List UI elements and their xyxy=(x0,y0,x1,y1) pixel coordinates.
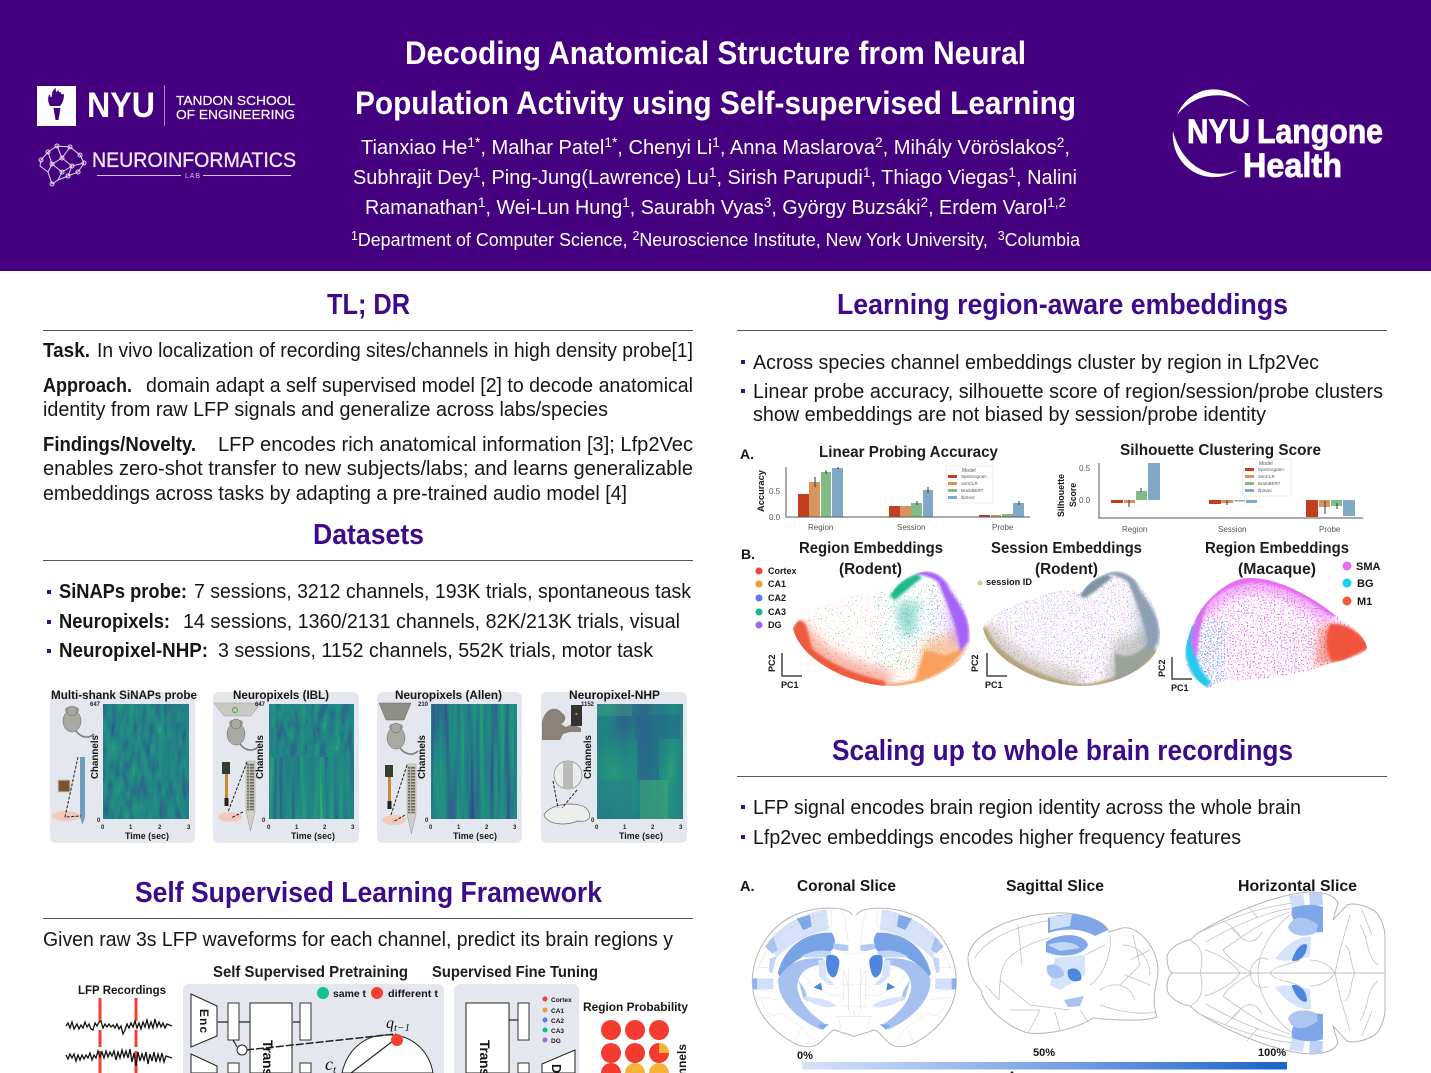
chart legend: BrainBERT xyxy=(1258,481,1281,486)
arrows xyxy=(218,1022,300,1047)
heatmap xyxy=(103,704,189,819)
legend: CA1 xyxy=(768,579,786,589)
heatmap xyxy=(597,704,683,819)
label q: t−1 xyxy=(394,1022,410,1034)
authors: , Saurabh Vyas xyxy=(630,196,764,219)
logo: NYU Tandon: NYU xyxy=(87,86,155,125)
transformer xyxy=(250,1003,292,1073)
authors: , xyxy=(1064,136,1070,159)
region probability pies: Region Probability xyxy=(583,1000,688,1014)
bar chart: silhouette clustering score: Session xyxy=(1218,525,1246,534)
title: Population Activity using Self-supervised Learning xyxy=(355,85,1076,121)
authors: Subhrajit Dey xyxy=(353,166,476,189)
title xyxy=(355,35,1076,121)
embedding bullets: show embeddings are not biased by session/probe identity xyxy=(753,403,1267,426)
logo: NYU Langone Health: Health xyxy=(1243,147,1342,185)
arrow to prediction xyxy=(351,1041,393,1073)
dataset bullets: 14 sessions, 1360/2131 channels, 82K/213K trials, visual xyxy=(183,610,680,633)
dataset card: Neuropixels IBL xyxy=(213,690,359,843)
LFP recordings xyxy=(66,983,172,1073)
icon: mouse xyxy=(387,723,418,754)
panel: self supervised learning framework xyxy=(43,877,693,1073)
point cloud xyxy=(793,571,970,688)
bar chart: silhouette clustering score: 0.0 xyxy=(1079,496,1091,505)
approach text: Approach. xyxy=(43,374,132,397)
region legend: Cortex xyxy=(551,997,572,1004)
scaling bullets: LFP signal encodes brain region identity across the whole brain xyxy=(753,796,1301,819)
authors: , Thiago Viegas xyxy=(870,166,1008,189)
dataset card: Neuropixel-NHP xyxy=(541,690,687,843)
dataset card: Neuropixel-NHP: 0 xyxy=(595,825,599,831)
pretraining diagram xyxy=(183,984,444,1073)
bar chart: silhouette clustering score xyxy=(1056,442,1363,534)
region legend: CA3 xyxy=(551,1028,564,1035)
affiliations: 1 xyxy=(351,229,358,243)
dataset card: Neuropixel-NHP: 2 xyxy=(651,825,655,831)
legend xyxy=(756,566,797,630)
logo: NYU Tandon xyxy=(37,85,295,126)
encoder second xyxy=(191,1054,217,1073)
brain: horizontal slice xyxy=(1167,892,1385,1054)
chart legend: lfp2vec xyxy=(961,495,976,500)
dataset card: Neuropixels Allen xyxy=(377,690,522,843)
heading: TL; DR: TL; DR xyxy=(327,289,410,321)
approach text: identity from raw LFP signals and generalize across labs/species xyxy=(43,398,608,421)
brain: sagittal slice xyxy=(968,913,1158,1033)
dataset card: Neuropixels IBL: Neuropixels (IBL) xyxy=(233,690,329,702)
authors: , Chenyi Li xyxy=(617,136,712,159)
dataset card: Neuropixel-NHP: 1 xyxy=(623,825,627,831)
panel: TL;DR xyxy=(43,289,693,505)
chart legend: Spectrogram xyxy=(1258,467,1284,472)
logo: Neuroinformatics Lab: NEUROINFORMATICS xyxy=(92,149,296,172)
dataset card: Neuropixels Allen: Channels xyxy=(416,735,428,779)
heatmap xyxy=(431,704,517,819)
logo: NYU Tandon: OF ENGINEERING xyxy=(176,107,295,122)
logo: NYU Langone Health: NYU xyxy=(1187,113,1250,151)
colour scale: 100% xyxy=(1258,1047,1286,1059)
panel: scaling up to whole brain recordings xyxy=(737,735,1387,1073)
dataset card: Neuropixel-NHP: 0 xyxy=(591,818,595,824)
dataset bullets xyxy=(47,580,692,662)
dataset card: Neuropixels IBL: 3 xyxy=(351,825,355,831)
affiliations: Neuroscience Institute, New York University, xyxy=(639,230,998,250)
prediction dot xyxy=(391,1034,403,1046)
authors: , Ping-Jung(Lawrence) Lu xyxy=(480,166,709,189)
scatter: session embeddings rodent: (Rodent) xyxy=(1035,561,1098,578)
logo: Neuroinformatics Lab: LAB xyxy=(185,173,200,180)
title: Decoding Anatomical Structure from Neural xyxy=(405,35,1026,71)
bar chart: silhouette clustering score: Silhouette Clustering Score xyxy=(1120,442,1321,459)
legend: same / different t: same t xyxy=(333,989,367,1000)
context circle xyxy=(342,1035,433,1073)
embedding boxes xyxy=(518,1003,529,1073)
authors: Ramanathan xyxy=(365,196,482,219)
authors: 1 xyxy=(478,194,486,210)
authors: 1 xyxy=(712,134,720,150)
authors: 1 xyxy=(473,164,481,180)
PC axes: PC2 xyxy=(970,654,980,672)
icon: Neuropixels probe xyxy=(382,764,416,834)
authors: 1 xyxy=(622,194,630,210)
PC axes xyxy=(767,653,802,690)
PC axes: PC1 xyxy=(985,680,1003,690)
legend: Cortex xyxy=(768,566,797,576)
chart legend: Spectrogram xyxy=(961,474,987,479)
dataset card: Neuropixels IBL: Time (sec) xyxy=(291,831,335,842)
bar chart: linear probing accuracy: Accuracy xyxy=(756,470,766,512)
affiliations: Columbia xyxy=(1005,230,1081,250)
authors: 2 xyxy=(921,194,928,210)
slice titles: Sagittal Slice xyxy=(1006,878,1104,895)
scatter: region embeddings macaque: (Macaque) xyxy=(1238,561,1316,578)
affiliations: Department of Computer Science, xyxy=(358,230,632,250)
PC axes xyxy=(1157,657,1192,693)
encoder xyxy=(191,994,217,1047)
dataset card: Multi-shank SiNAPs probe: 0 xyxy=(101,825,105,831)
icon: Neuropixels probe xyxy=(218,761,255,831)
dataset card: Neuropixels Allen: 2 xyxy=(485,825,489,831)
PC axes: PC2 xyxy=(767,654,777,672)
authors: , Mihály Vöröslakos xyxy=(883,136,1057,159)
scatter: region embeddings rodent xyxy=(756,540,970,690)
dataset card: Neuropixels IBL: Channels xyxy=(254,735,266,779)
icon: mouse xyxy=(63,706,94,737)
dataset card: Neuropixels IBL: 0 xyxy=(267,825,271,831)
dataset card: Multi-shank SiNAPs probe: Time (sec) xyxy=(125,831,169,842)
heading: scaling up: Scaling up to whole brain recordings xyxy=(832,735,1293,767)
authors: 1* xyxy=(604,134,618,150)
region probability pies xyxy=(583,1000,689,1073)
chart legend: SimCLR xyxy=(1258,474,1276,479)
dataset card: Neuropixel-NHP: 1152 xyxy=(581,702,595,708)
dataset bullets: SiNAPs probe: xyxy=(59,580,187,603)
logo: NYU Tandon: TANDON SCHOOL xyxy=(176,93,295,108)
point cloud xyxy=(1185,575,1370,690)
bar chart: linear probing accuracy: Probe xyxy=(992,523,1014,532)
slice titles: Coronal Slice xyxy=(797,878,896,895)
dataset bullets: 3 sessions, 1152 channels, 552K trials, motor task xyxy=(218,639,654,662)
embedding bullets xyxy=(741,351,1383,426)
embedding boxes xyxy=(228,1003,311,1073)
authors: Tianxiao He xyxy=(361,136,470,159)
task text: Task. xyxy=(43,339,90,362)
scatter: session embeddings rodent xyxy=(970,540,1160,690)
chart legend xyxy=(1243,459,1291,496)
label q: q xyxy=(386,1015,394,1032)
arrow xyxy=(509,1019,518,1021)
authors: , Erdem Varol xyxy=(928,196,1047,219)
colour scale: 50% xyxy=(1033,1047,1055,1059)
dataset card: Multi-shank SiNAPs probe: Channels xyxy=(89,735,101,779)
authors: 1 xyxy=(709,164,717,180)
scatter: region embeddings macaque: Region Embeddings xyxy=(1205,540,1349,557)
LFP recordings: LFP Recordings xyxy=(78,983,166,997)
authors: , Anna Maslarova xyxy=(720,136,876,159)
slice titles xyxy=(797,878,1357,895)
heatmap xyxy=(269,704,354,819)
dataset card: Neuropixels IBL: 1 xyxy=(295,825,299,831)
dataset card: Neuropixels IBL: 2 xyxy=(323,825,327,831)
heading: datasets: Datasets xyxy=(313,519,424,551)
legend: M1 xyxy=(1357,596,1372,608)
embedding bullets: Linear probe accuracy, silhouette score of region/session/probe clusters xyxy=(753,380,1383,403)
scatter: region embeddings rodent: Region Embeddings xyxy=(799,540,943,557)
affiliations: 2 xyxy=(632,229,639,243)
region legend: DG xyxy=(551,1038,561,1045)
logo: Neuroinformatics Lab xyxy=(39,144,296,186)
findings text: enables zero-shot transfer to new subjects/labs; and learns generalizable xyxy=(43,457,693,480)
bar chart: linear probing accuracy: Linear Probing Accuracy xyxy=(819,444,998,461)
authors xyxy=(353,134,1077,219)
legend: DG xyxy=(768,620,782,630)
region legend: CA1 xyxy=(551,1008,564,1015)
bar chart: linear probing accuracy: Region xyxy=(808,523,833,532)
bar chart: silhouette clustering score: 0.5 xyxy=(1079,464,1091,473)
PC axes: PC2 xyxy=(1157,659,1167,677)
label A: A. xyxy=(740,446,754,462)
authors: 3 xyxy=(764,194,772,210)
legend xyxy=(1342,561,1380,608)
icon: silicon probe xyxy=(52,757,85,825)
authors: 1* xyxy=(467,134,481,150)
bar chart: linear probing accuracy: 0.5 xyxy=(769,487,781,496)
dataset card: Neuropixels Allen: 1 xyxy=(457,825,461,831)
findings text: embeddings across tasks by adapting a pre-trained audio model [4] xyxy=(43,482,627,505)
authors: , Sirish Parupudi xyxy=(716,166,863,189)
scatter: region embeddings rodent: (Rodent) xyxy=(839,561,902,578)
region legend: CA2 xyxy=(551,1018,564,1025)
heading: framework: Self Supervised Learning Framework xyxy=(135,877,603,909)
bar chart: silhouette clustering score: Silhouette xyxy=(1056,474,1066,517)
subheading: pretraining: Self Supervised Pretraining xyxy=(213,964,408,981)
panel: datasets xyxy=(43,519,693,843)
chart legend: Model xyxy=(962,468,976,474)
bar chart: linear probing accuracy: Session xyxy=(897,523,925,532)
bar chart: silhouette clustering score: Score xyxy=(1068,483,1078,507)
dataset card: Neuropixels Allen: 3 xyxy=(513,825,517,831)
approach text: domain adapt a self supervised model [2] to decode anatomical xyxy=(146,374,693,397)
bar chart: linear probing accuracy: 0.0 xyxy=(769,513,781,522)
legend: same / different t: different t xyxy=(388,989,439,1000)
scatter: region embeddings macaque xyxy=(1157,540,1380,693)
authors: , Wei-Lun Hung xyxy=(485,196,622,219)
dataset card: Neuropixel-NHP: Channels xyxy=(582,735,594,779)
authors: 2 xyxy=(875,134,883,150)
dataset card: Neuropixel-NHP: 3 xyxy=(679,825,683,831)
dataset card: Multi-shank SiNAPs probe xyxy=(50,690,197,843)
point cloud xyxy=(983,571,1160,688)
legend: CA3 xyxy=(768,607,786,617)
PC axes: PC1 xyxy=(781,680,799,690)
subheading: fine tuning: Supervised Fine Tuning xyxy=(432,964,598,981)
chart legend xyxy=(946,466,993,503)
dataset card: Multi-shank SiNAPs probe: 2 xyxy=(158,825,162,831)
findings text xyxy=(43,433,693,505)
PC axes xyxy=(970,653,1007,690)
dataset card: Multi-shank SiNAPs probe: 0 xyxy=(97,818,101,824)
authors: 1,2 xyxy=(1047,194,1066,210)
icon: mouse xyxy=(227,719,258,750)
PC axes: PC1 xyxy=(1171,683,1189,693)
chart legend: Model xyxy=(1259,461,1273,467)
authors: 1 xyxy=(863,164,871,180)
icon: macaque at screen xyxy=(542,705,582,740)
dataset card: Neuropixels IBL: 0 xyxy=(262,818,266,824)
region legend xyxy=(542,996,572,1045)
scaling bullets: Lfp2vec embeddings encodes higher frequency features xyxy=(753,826,1241,849)
logo: NYU Langone Health: Langone xyxy=(1257,113,1383,151)
colour scale: 0% xyxy=(797,1050,813,1062)
logo: NYU Langone Health xyxy=(1173,89,1383,185)
chart legend: BrainBERT xyxy=(961,488,984,493)
authors: 1 xyxy=(1008,164,1016,180)
dataset bullets: 7 sessions, 3212 channels, 193K trials, spontaneous task xyxy=(194,580,692,603)
approach text xyxy=(43,374,693,421)
icon: visual stimulus screen xyxy=(379,703,411,720)
legend: same / different t xyxy=(317,987,439,1000)
findings text: LFP encodes rich anatomical information [3]; Lfp2Vec xyxy=(218,433,693,456)
encoder: Enc xyxy=(197,1009,211,1033)
anchor and dashed link xyxy=(237,1034,396,1055)
legend: BG xyxy=(1357,578,1374,590)
authors: 2 xyxy=(1057,134,1065,150)
task text: In vivo localization of recording sites/channels in high density probe[1] xyxy=(97,339,693,362)
label A: A. xyxy=(740,879,754,895)
panel: learning region-aware embeddings xyxy=(737,289,1387,693)
dataset bullets: Neuropixel-NHP: xyxy=(59,639,208,662)
header banner xyxy=(0,0,1431,271)
bar chart: linear probing accuracy xyxy=(756,444,1030,532)
dataset card: Neuropixels Allen: Time (sec) xyxy=(453,831,497,842)
dataset card: Multi-shank SiNAPs probe: 1 xyxy=(129,825,133,831)
scaling bullets xyxy=(741,796,1301,849)
icon: macaque brain and probe xyxy=(544,761,590,824)
dataset card: Neuropixels Allen: Neuropixels (Allen) xyxy=(395,690,502,702)
dataset card: Neuropixel-NHP: Neuropixel-NHP xyxy=(569,690,660,702)
authors: , Malhar Patel xyxy=(480,136,604,159)
heading: region-aware embeddings: Learning region-aware embeddings xyxy=(837,289,1288,321)
label B: B. xyxy=(741,546,755,562)
legend: CA2 xyxy=(768,593,786,603)
legend: SMA xyxy=(1356,561,1380,573)
dataset card: Neuropixel-NHP: Time (sec) xyxy=(619,831,663,842)
embedding bullets: Across species channel embeddings cluster by region in Lfp2Vec xyxy=(753,351,1319,374)
slice titles: Horizontal Slice xyxy=(1238,878,1357,895)
affiliations: 3 xyxy=(998,229,1005,243)
dataset card: Neuropixels Allen: 0 xyxy=(425,818,429,824)
scatter: session embeddings rodent: Session Embeddings xyxy=(991,540,1142,557)
authors: , György Buzsáki xyxy=(771,196,921,219)
icon: behaviour rig xyxy=(214,703,261,716)
legend: session ID xyxy=(986,577,1032,587)
dataset card: Multi-shank SiNAPs probe: Multi-shank SiNAPs probe xyxy=(51,690,197,702)
findings text: Findings/Novelty. xyxy=(43,433,196,456)
dataset bullets: Neuropixels: xyxy=(59,610,170,633)
chart legend: SimCLR xyxy=(961,481,979,486)
authors: , Nalini xyxy=(1016,166,1077,189)
chart legend: lfp2vec xyxy=(1258,488,1273,493)
dataset card: Multi-shank SiNAPs probe: 3 xyxy=(187,825,191,831)
dataset card: Neuropixels Allen: 210 xyxy=(418,702,429,708)
dataset card: Neuropixels IBL: 647 xyxy=(255,702,266,708)
brain: coronal slice xyxy=(752,908,956,1047)
dataset card: Multi-shank SiNAPs probe: 647 xyxy=(90,702,101,708)
fine tuning diagram xyxy=(454,984,579,1073)
dataset card: Neuropixels Allen: 0 xyxy=(429,825,433,831)
bar chart: silhouette clustering score: Region xyxy=(1122,525,1147,534)
colour scale xyxy=(797,1047,1287,1073)
framework intro: Given raw 3s LFP waveforms for each channel, predict its brain regions y xyxy=(43,928,674,951)
bar chart: silhouette clustering score: Probe xyxy=(1319,525,1341,534)
